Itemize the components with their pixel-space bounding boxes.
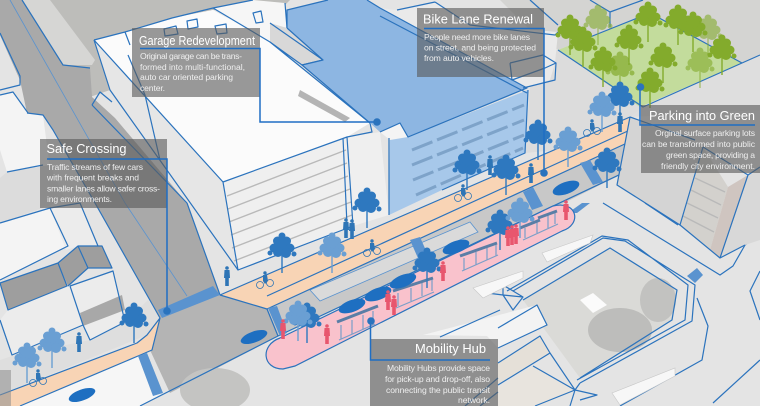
mobility hub pink platform xyxy=(266,205,575,369)
left block white building xyxy=(0,92,68,280)
leader line xyxy=(140,48,377,122)
tower window face xyxy=(680,147,728,250)
blue front face xyxy=(389,90,528,215)
body text: center. xyxy=(140,83,165,93)
leader dot xyxy=(637,83,644,91)
crosswalk at intersection left xyxy=(138,353,163,396)
cars xyxy=(67,178,581,405)
station roof white xyxy=(423,305,547,348)
blue garage building xyxy=(287,0,528,215)
upper left sidewalk xyxy=(22,0,95,65)
lot left of park xyxy=(525,50,643,153)
car 3 xyxy=(337,296,367,316)
bus left xyxy=(473,271,523,298)
panel: mobility hub xyxy=(367,317,498,406)
leader dot xyxy=(373,118,381,126)
car 5 xyxy=(388,270,418,292)
main street surface xyxy=(267,143,640,336)
body text: Original garage can be trans- xyxy=(140,51,242,61)
tower pink strip xyxy=(710,175,748,258)
blue trees xyxy=(120,82,634,343)
leader line xyxy=(370,321,490,360)
blue pedestrians xyxy=(76,112,623,352)
orange bike lane main xyxy=(220,117,630,309)
grey tree canopy lower centre xyxy=(180,368,250,406)
car 6 xyxy=(441,237,471,257)
left block outlines xyxy=(0,92,125,355)
lower roof band xyxy=(80,295,125,326)
bus shelters xyxy=(337,211,558,340)
blue cyclists xyxy=(30,119,600,387)
left block side lot xyxy=(50,203,98,250)
body text: from auto vehicles. xyxy=(424,53,494,63)
body text xyxy=(46,162,160,204)
body text: Traffic streams of few cars xyxy=(47,162,143,172)
blue roof parapet xyxy=(380,123,408,140)
station lower roof xyxy=(498,366,575,406)
body text: Orginal surface parking lots xyxy=(655,128,755,138)
top centre white building xyxy=(380,2,558,88)
green park xyxy=(558,13,760,107)
plaza pavilion xyxy=(580,293,607,313)
crosswalk at plaza xyxy=(687,268,703,283)
panel: parking into green xyxy=(637,83,760,173)
leader dot xyxy=(163,307,171,315)
small grey tab bottom left xyxy=(0,370,11,406)
plaza and transit station xyxy=(423,203,760,406)
concrete parking block xyxy=(617,117,703,225)
body text: green space, providing a xyxy=(666,150,755,160)
thin street centre line xyxy=(10,0,187,296)
pink pedestrians xyxy=(280,200,569,344)
garage upper structure xyxy=(213,0,287,47)
car 4 xyxy=(363,284,393,304)
heading: Bike Lane Renewal xyxy=(423,12,533,26)
bus upper xyxy=(542,235,593,262)
houses block xyxy=(0,246,160,395)
plaza side roads xyxy=(603,203,760,406)
heading: Mobility Hub xyxy=(415,341,486,356)
aerial context top left xyxy=(0,0,290,97)
panel: garage redevelopment xyxy=(132,28,381,126)
intersection xyxy=(150,295,278,393)
leader line xyxy=(47,159,167,311)
leader dot xyxy=(540,169,548,177)
lot right of park xyxy=(630,55,760,117)
lower left sidewalk xyxy=(20,356,163,406)
body text xyxy=(385,363,491,405)
rooftop solar array xyxy=(298,90,350,122)
plaza ground xyxy=(523,248,677,378)
orange bike lane left xyxy=(0,318,160,406)
panel: bike lane renewal xyxy=(417,8,548,177)
body text xyxy=(424,32,536,63)
leader dot xyxy=(367,317,375,325)
body text: auto car oriented parking xyxy=(140,72,233,82)
body text: Mobility Hubs provide space xyxy=(387,363,490,373)
station roof tan xyxy=(498,336,550,385)
leader line xyxy=(424,28,544,173)
park lawn xyxy=(558,13,742,107)
body text: connecting the public transit xyxy=(386,385,491,395)
bus lower xyxy=(612,368,675,405)
body text: on street, and being protected xyxy=(424,42,536,52)
blue roof xyxy=(287,0,527,137)
crosswalk at intersection top xyxy=(158,286,220,318)
car 7 xyxy=(551,178,581,198)
body text xyxy=(140,51,245,93)
body text: friendly city environment. xyxy=(661,161,755,171)
heading: Parking into Green xyxy=(649,108,755,123)
garage right face xyxy=(223,132,389,270)
body text: formed into multi-functional, xyxy=(140,62,245,72)
body text: ing environments. xyxy=(47,194,112,204)
pale blue trees xyxy=(12,92,616,383)
median strip xyxy=(310,222,478,301)
body text: People need more bike lanes xyxy=(424,32,530,42)
rooftop units xyxy=(164,11,263,36)
body text: with frequent breaks and xyxy=(46,172,139,182)
mid left block xyxy=(0,165,65,223)
crosswalks xyxy=(138,160,703,396)
crosswalk lower mid block xyxy=(410,237,431,265)
garage stair roof xyxy=(270,23,323,65)
tower right face xyxy=(720,167,760,258)
buses xyxy=(473,235,675,405)
plaza tree shadow xyxy=(588,308,652,352)
garage left face xyxy=(94,40,238,270)
heading: Safe Crossing xyxy=(46,141,126,156)
body text xyxy=(642,128,756,171)
aerial context top centre xyxy=(500,0,760,63)
green trees xyxy=(556,2,736,108)
corner sidewalk xyxy=(0,300,160,395)
car 2 xyxy=(67,385,97,405)
body text: smaller lanes allow safer cross- xyxy=(47,184,160,194)
panel: safe crossing xyxy=(40,139,171,315)
house roofs dark xyxy=(0,246,112,310)
right high-rise building xyxy=(617,117,760,258)
body text: can be transformed into public xyxy=(642,139,756,149)
white garage building xyxy=(94,0,389,270)
left side road xyxy=(0,0,220,318)
top centre building outlines xyxy=(435,0,643,88)
heading: Garage Redevelopment xyxy=(139,33,255,48)
body text: for pick-up and drop-off, also xyxy=(385,374,490,384)
house walls xyxy=(0,271,125,355)
crosswalk mid block xyxy=(580,160,603,185)
crosswalk right of hub xyxy=(568,203,590,213)
body text: network. xyxy=(458,395,490,405)
crosswalk near hub xyxy=(268,306,287,336)
crosswalk at hub end xyxy=(523,187,543,210)
leader line xyxy=(640,87,755,125)
car 1 xyxy=(239,327,269,347)
garage roof xyxy=(94,10,370,182)
